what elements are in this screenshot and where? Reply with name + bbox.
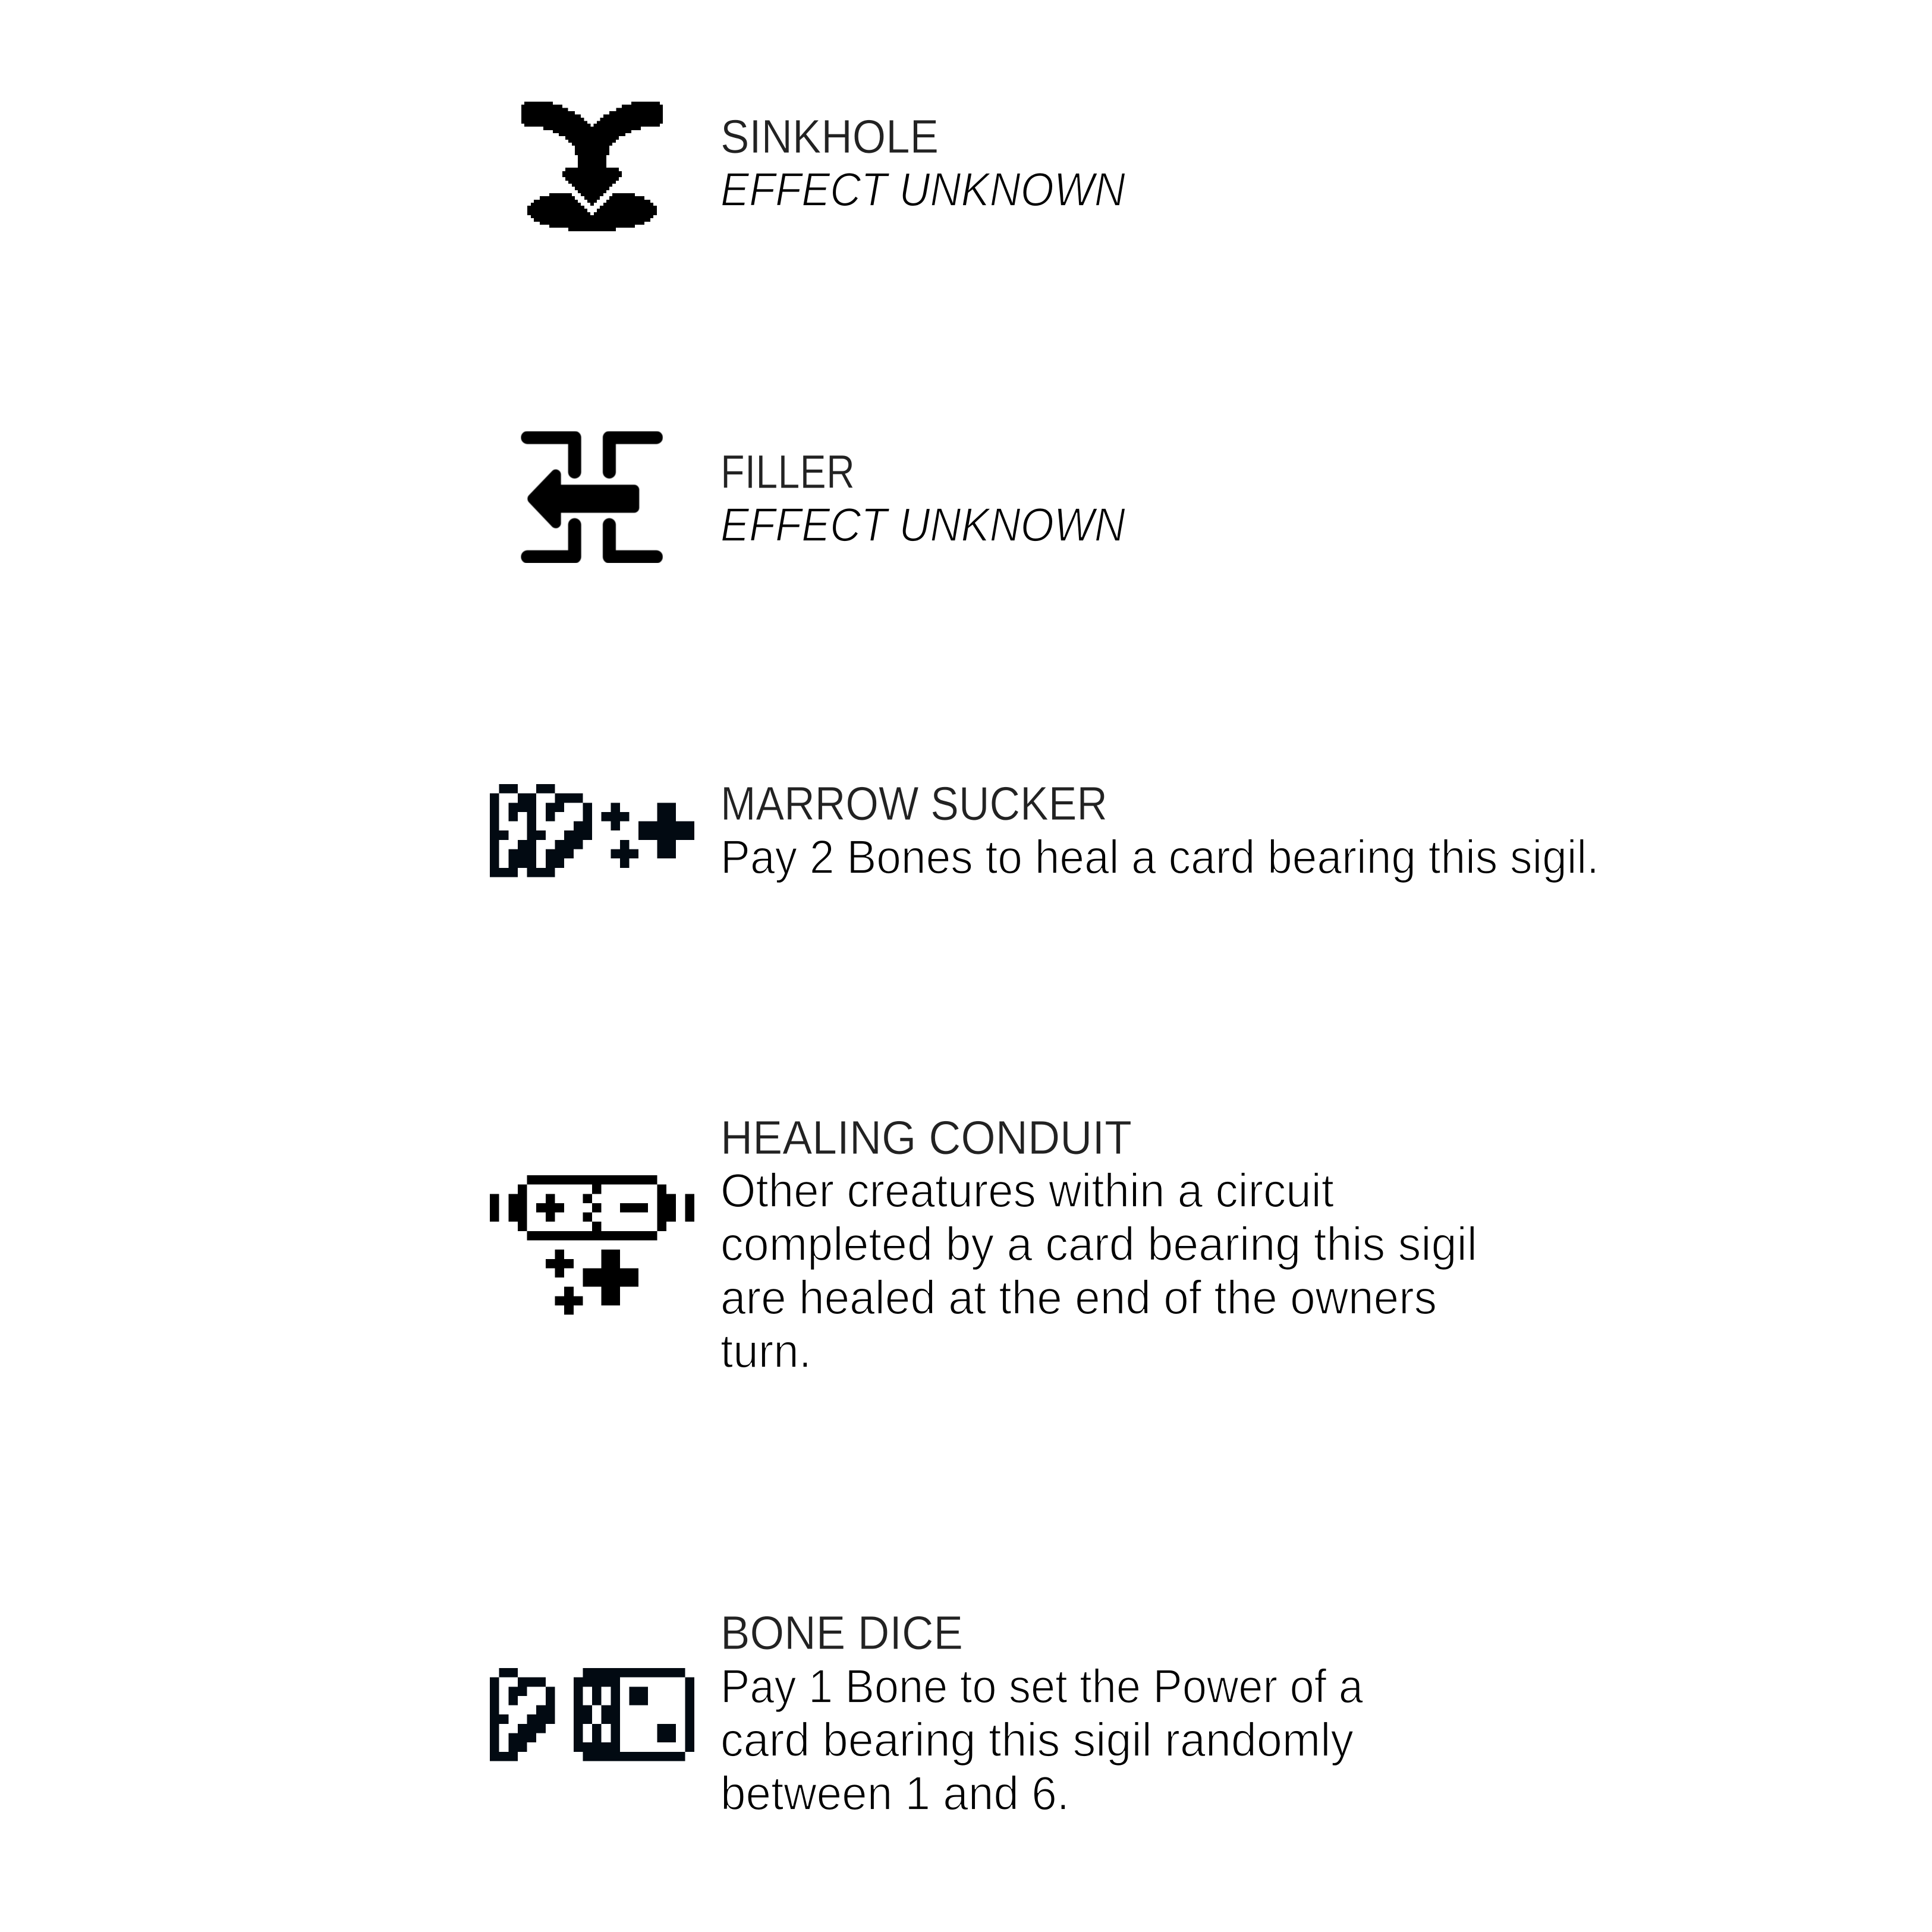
text: healing conduit description: turn. <box>720 1324 811 1377</box>
text: healing conduit description <box>720 1111 1477 1377</box>
panel: marrow sucker sigil <box>490 777 1599 883</box>
text: filler description: EFFECT UNKNOWN <box>720 498 1125 551</box>
text: filler description: FILLER <box>720 445 855 498</box>
icon: bone dice <box>490 1668 694 1761</box>
text: healing conduit description: completed by a card bearing this sigil <box>720 1217 1477 1270</box>
text: bone dice description: BONE DICE <box>720 1606 963 1659</box>
icon: sinkhole <box>521 102 663 231</box>
panel: healing conduit sigil <box>490 1111 1477 1377</box>
text: healing conduit description: HEALING CONDUIT <box>720 1111 1132 1164</box>
text: sinkhole description <box>720 110 1125 216</box>
text: bone dice description: Pay 1 Bone to set the Power of a <box>720 1660 1363 1713</box>
text: healing conduit description: are healed at the end of the owners <box>720 1271 1437 1324</box>
icon: filler <box>527 438 656 557</box>
text: sinkhole description: EFFECT UNKNOWN <box>720 163 1125 216</box>
text: filler description <box>720 445 1125 551</box>
text: healing conduit description: Other creatures within a circuit <box>720 1164 1334 1217</box>
text: marrow sucker description: Pay 2 Bones to heal a card bearing this sigil. <box>720 830 1599 883</box>
icon: healing conduit <box>490 1175 694 1315</box>
text: bone dice description: between 1 and 6. <box>720 1767 1069 1820</box>
text: bone dice description <box>720 1606 1363 1820</box>
icon: marrow sucker <box>490 784 694 877</box>
text: bone dice description: card bearing this sigil randomly <box>720 1713 1354 1766</box>
text: sinkhole description: SINKHOLE <box>720 110 939 163</box>
panel: filler sigil <box>527 438 1125 557</box>
text: marrow sucker description: MARROW SUCKER <box>720 777 1107 830</box>
panel: sinkhole sigil <box>521 102 1125 231</box>
text: marrow sucker description <box>720 777 1599 883</box>
panel: bone dice sigil <box>490 1606 1363 1820</box>
